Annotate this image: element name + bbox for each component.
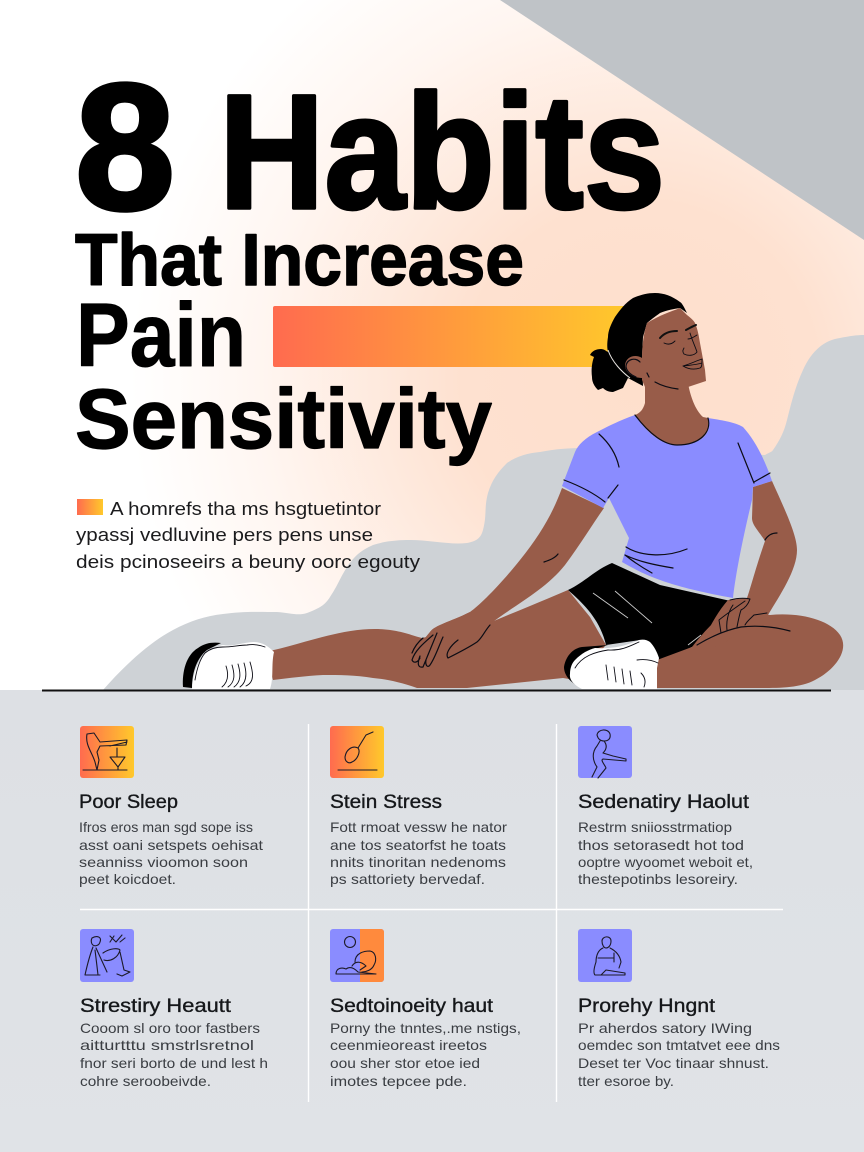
folded leg — [652, 605, 843, 688]
title line: Sensitivity: Sensitivity — [75, 372, 492, 466]
description — [330, 1020, 521, 1089]
description: ane tos seatorfst he toats — [330, 837, 506, 853]
description — [79, 819, 263, 887]
habit card: Prorehy Hngnt — [578, 929, 780, 1089]
ponytail — [590, 349, 628, 392]
description: tter esoroe by. — [578, 1073, 674, 1089]
icon: seated figure — [578, 929, 632, 982]
description: cohre seroobeivde. — [80, 1073, 211, 1089]
grey corner triangle — [500, 0, 864, 240]
left shoe — [183, 642, 274, 689]
description: Deset ter Voc tinaar shnust. — [578, 1055, 769, 1071]
description: Porny the tnntes,.me nstigs, — [330, 1020, 521, 1036]
panel: habits grid background — [0, 690, 864, 1152]
description: peet koicdoet. — [79, 871, 176, 887]
description — [578, 819, 753, 887]
description — [578, 1020, 780, 1089]
description: thos setorasedt hot tod — [578, 837, 744, 853]
description: Cooom sl oro toor fastbers — [80, 1020, 260, 1036]
title — [75, 47, 665, 466]
description: Fott rmoat vessw he nator — [330, 819, 507, 835]
habit card: Sedenatiry Haolut — [578, 726, 753, 887]
description: oemdec son tmtatvet eee dns — [578, 1037, 780, 1053]
grid dividers — [80, 724, 783, 1102]
description: fnor seri borto de und lest h — [80, 1055, 268, 1071]
description: asst oani setspets oehisat — [79, 837, 263, 853]
description — [80, 1020, 268, 1089]
icon: spoon — [330, 726, 384, 778]
description — [330, 819, 507, 887]
viewer-left hand — [411, 612, 490, 666]
description: ceenmieoreast ireetos — [330, 1037, 487, 1053]
description: thestepotinbs lesoreiry. — [578, 871, 738, 887]
habit card: Strestiry Heautt — [80, 929, 268, 1089]
panel: hero background — [0, 0, 864, 690]
heading: Sedenatiry Haolut — [578, 791, 750, 813]
description: oou sher stor etoe ied — [330, 1055, 480, 1071]
heading: Poor Sleep — [79, 791, 178, 813]
icon: person lying with moon — [330, 929, 384, 982]
t-shirt — [562, 415, 772, 598]
subtitle text block: deis pcinoseeirs a beuny oorc egouty — [76, 552, 420, 572]
right shoe — [564, 640, 659, 689]
icon: walking figure — [578, 726, 632, 778]
subtitle text block: A homrefs tha ms hsgtuetintor — [110, 499, 381, 519]
description: aitturtttu smstrlsretnol — [80, 1037, 254, 1053]
heading: Prorehy Hngnt — [578, 995, 716, 1017]
heading: Sedtoinoeity haut — [330, 995, 494, 1017]
title line: That Increase: That Increase — [75, 220, 524, 301]
icon: person with bowl — [80, 929, 134, 982]
description: Restrm sniiosstrmatiop — [578, 819, 732, 835]
neck — [635, 380, 709, 445]
icon: sleeping figure and cup — [80, 726, 134, 778]
subtitle text block — [76, 499, 420, 572]
viewer-right arm and hand — [700, 481, 797, 650]
description: seanniss vioomon soon — [79, 854, 248, 870]
description: imotes tepcee pde. — [330, 1073, 467, 1089]
heading: Strestiry Heautt — [80, 995, 232, 1017]
description: Pr aherdos satory IWing — [578, 1020, 752, 1036]
description: nnits tinoritan nedenoms — [330, 854, 506, 870]
extended leg — [265, 590, 606, 688]
subtitle marker — [77, 499, 103, 515]
habit card: Stein Stress — [330, 726, 507, 887]
gradient bar — [273, 306, 628, 367]
arm creases, shorts stitching and hand lines — [412, 533, 790, 667]
illustration: seated woman stretching — [183, 293, 843, 689]
hair — [607, 293, 687, 386]
facial features — [626, 325, 702, 389]
shorts — [568, 563, 735, 662]
viewer-left arm — [411, 488, 604, 666]
habit card: Poor Sleep — [79, 726, 263, 887]
title word: Habits: Habits — [219, 60, 665, 243]
ground line — [42, 690, 831, 692]
shirt fold lines — [564, 415, 770, 573]
description: ooptre wyoomet weboit et, — [578, 854, 753, 870]
ear — [625, 356, 642, 378]
description: Ifros eros man sgd sope iss — [79, 819, 253, 835]
title line: Pain: Pain — [76, 286, 246, 386]
subtitle text block: ypassj vedluvine pers pens unse — [76, 525, 373, 545]
heading: Stein Stress — [330, 791, 442, 813]
title numeral: 8: 8 — [75, 47, 175, 248]
face — [642, 308, 706, 390]
grey blob behind figure — [103, 335, 864, 690]
description: ps sattoriety bervedaf. — [330, 871, 485, 887]
habit card: Sedtoinoeity haut — [330, 929, 521, 1089]
